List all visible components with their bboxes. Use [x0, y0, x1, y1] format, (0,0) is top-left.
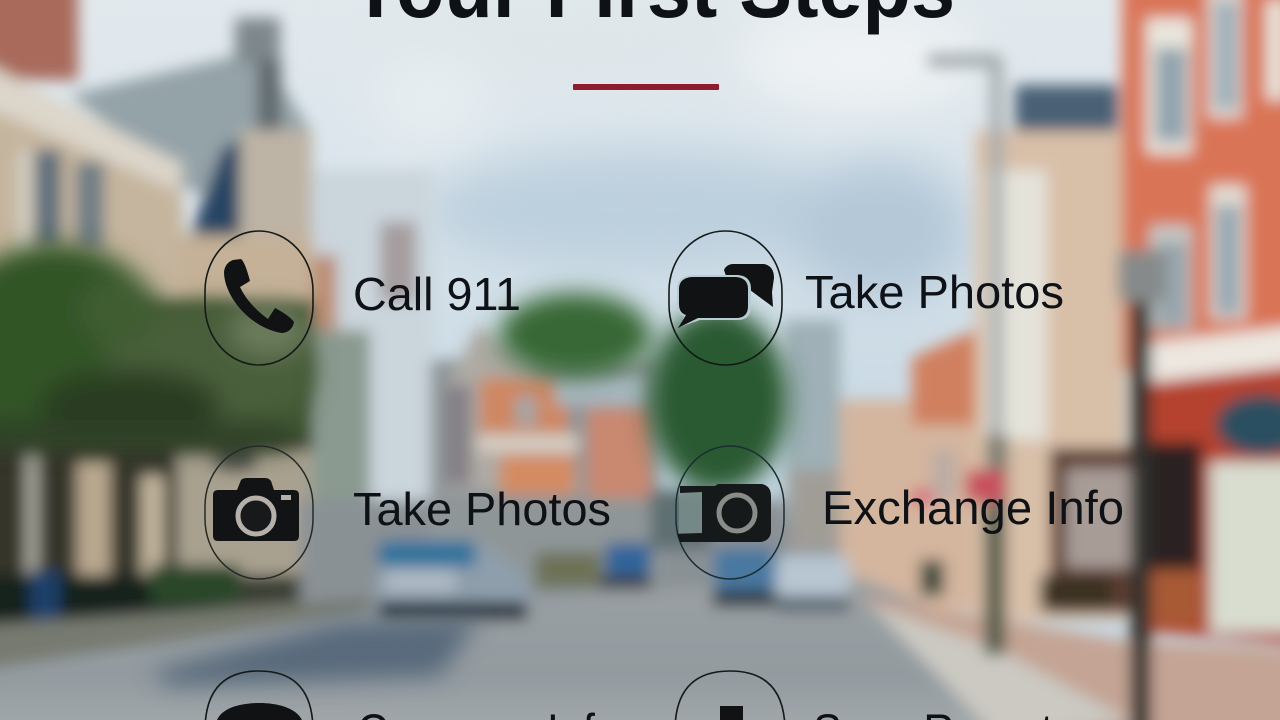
step: cropped info item — [205, 671, 619, 720]
label: Take Photos: Take Photos — [353, 483, 611, 535]
label: Exchange Info: Exchange Info — [822, 481, 1124, 534]
icon: upright shape in oval — [675, 671, 785, 720]
label: Take Photos: Take Photos — [805, 266, 1064, 318]
step: Take Photos, camera — [205, 446, 611, 579]
icon: broken camera in oval — [676, 446, 784, 579]
road shadow — [150, 618, 480, 686]
icon: chat bubbles in oval — [669, 231, 782, 365]
icon: phone in oval — [205, 231, 313, 365]
left buildings — [0, 0, 78, 80]
icon: dome in oval — [205, 671, 313, 720]
lower storefronts — [0, 300, 315, 450]
cars — [375, 538, 532, 620]
icon: camera in oval — [205, 446, 313, 579]
right buildings — [840, 400, 980, 610]
step: Save Report — [675, 671, 1053, 720]
title accent bar — [573, 84, 719, 90]
step: Exchange Info — [676, 446, 1124, 579]
foliage — [0, 244, 788, 492]
ground — [0, 578, 1280, 720]
step: chat bubbles, Take Photos — [669, 231, 1064, 365]
step: Call 911 — [205, 231, 521, 365]
lamp — [1130, 300, 1151, 720]
distance — [300, 500, 860, 615]
label: Call 911: Call 911 — [353, 268, 521, 320]
white building — [313, 170, 433, 540]
